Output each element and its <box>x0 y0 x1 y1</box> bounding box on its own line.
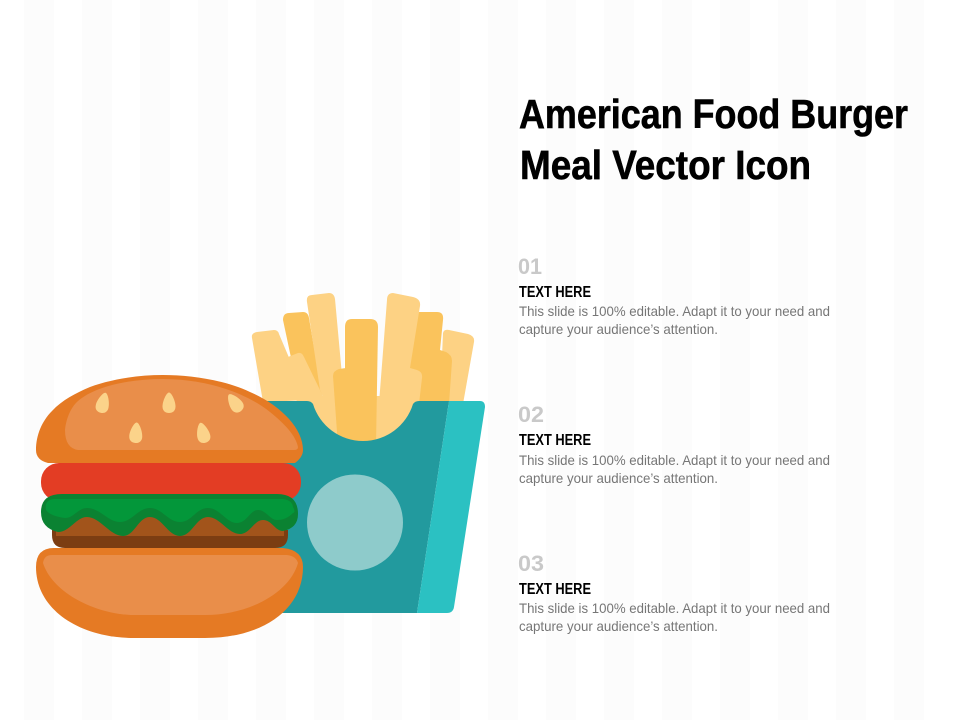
title: American Food Burger <box>519 91 908 137</box>
top bun <box>36 375 303 463</box>
text block 01: capture your audience’s attention. <box>519 321 718 337</box>
text block 02 <box>518 402 830 486</box>
circle label <box>307 474 403 570</box>
title: Meal Vector Icon <box>520 142 811 188</box>
text block 03: 03 <box>518 551 544 576</box>
title <box>519 91 908 188</box>
text block 02: TEXT HERE <box>519 432 591 449</box>
icon: french fries <box>252 293 474 446</box>
text block 02: 02 <box>518 402 544 427</box>
text block 02: capture your audience’s attention. <box>519 470 718 486</box>
text block 01: 01 <box>518 254 542 279</box>
text block 01 <box>518 254 830 337</box>
text block 03: TEXT HERE <box>519 581 591 598</box>
text block 01: This slide is 100% editable. Adapt it to your need and <box>519 303 830 319</box>
tomato <box>41 463 301 501</box>
lettuce <box>41 494 298 536</box>
text block 01: TEXT HERE <box>519 284 591 301</box>
sesame seeds <box>94 391 246 444</box>
patty <box>52 512 288 548</box>
text block 03: This slide is 100% editable. Adapt it to your need and <box>519 600 830 616</box>
icon: fries box <box>262 401 485 613</box>
text block 03 <box>518 551 830 634</box>
text block 03: capture your audience’s attention. <box>519 618 718 634</box>
bottom bun <box>36 548 303 638</box>
text block 02: This slide is 100% editable. Adapt it to your need and <box>519 452 830 468</box>
icon: hamburger <box>36 375 303 638</box>
